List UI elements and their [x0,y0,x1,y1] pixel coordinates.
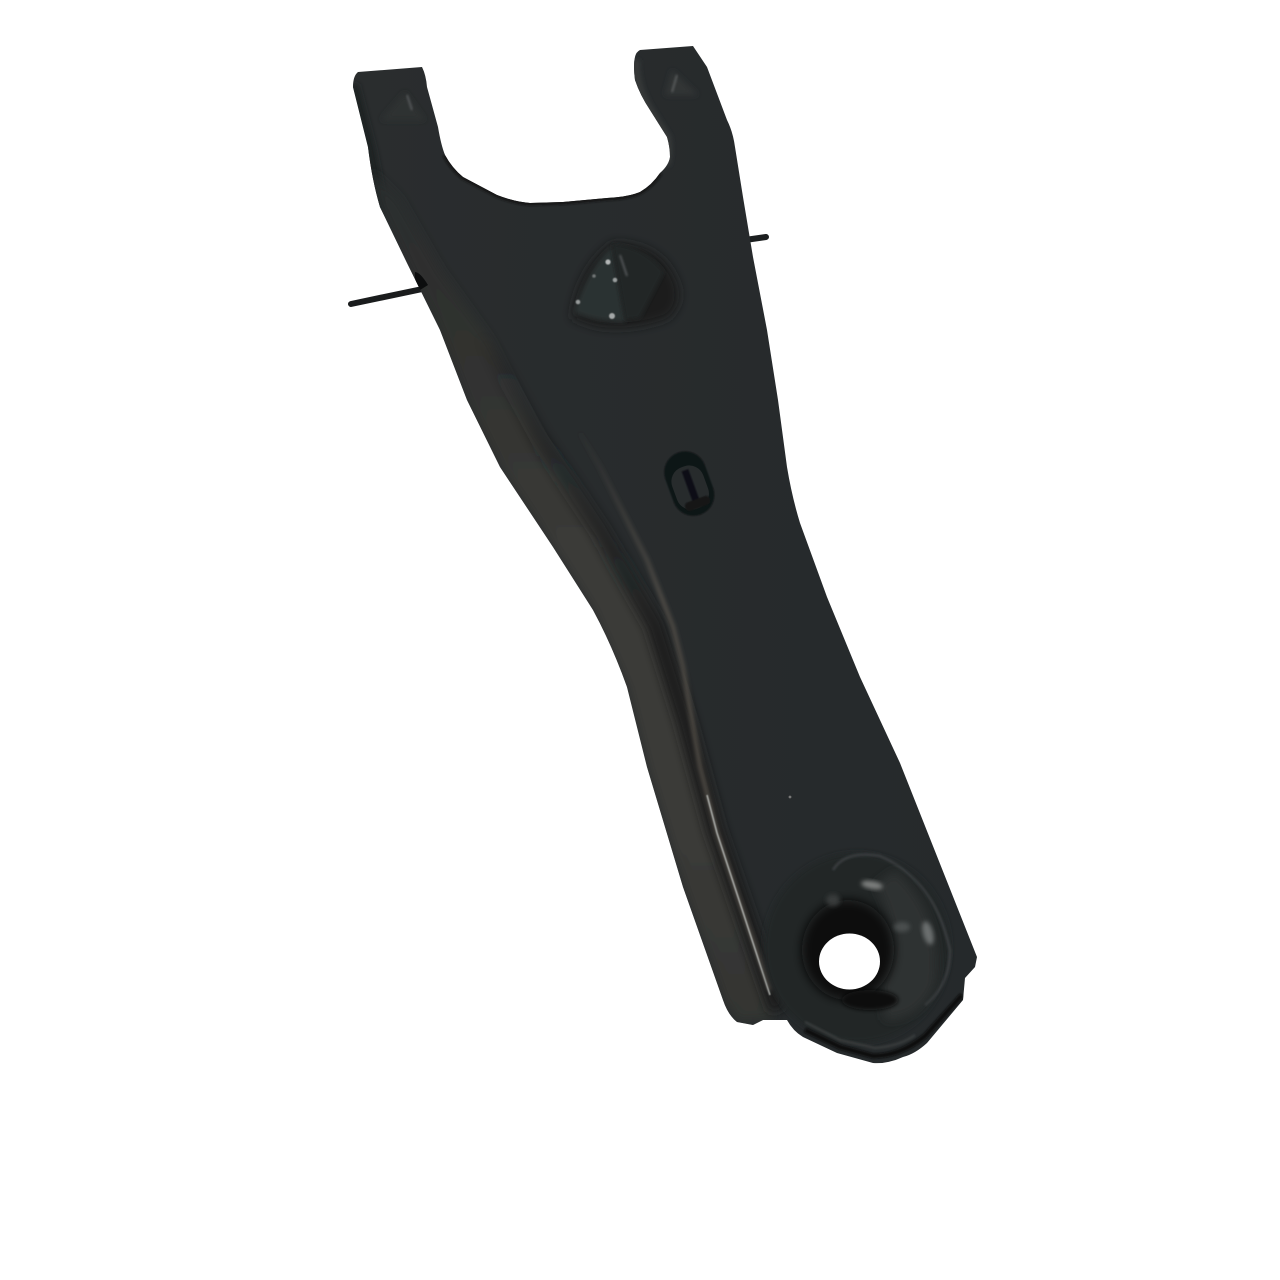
hole boss [764,853,950,1043]
fork body [340,40,990,1070]
right prong inner wall [636,60,668,165]
side notch for left pin [415,272,428,290]
left prong dark edge [353,85,382,210]
left spring pin [351,287,432,304]
pivot cone [572,243,679,328]
bottom lip [805,995,962,1056]
groove beside bevel [526,432,782,1014]
oval slot [664,451,715,516]
left prong boss mark [406,94,414,112]
lower crease glint [707,795,770,995]
right spring pin [745,237,766,240]
fork throat shadow edge [445,155,660,203]
crease highlight [606,478,772,991]
right prong boss mark [668,74,691,94]
bottom lip highlight [805,1022,915,1048]
mounting hole [819,934,880,990]
product illustration: clutch fork [348,46,977,1064]
left bevel band [370,170,775,1022]
small speck [789,796,791,798]
